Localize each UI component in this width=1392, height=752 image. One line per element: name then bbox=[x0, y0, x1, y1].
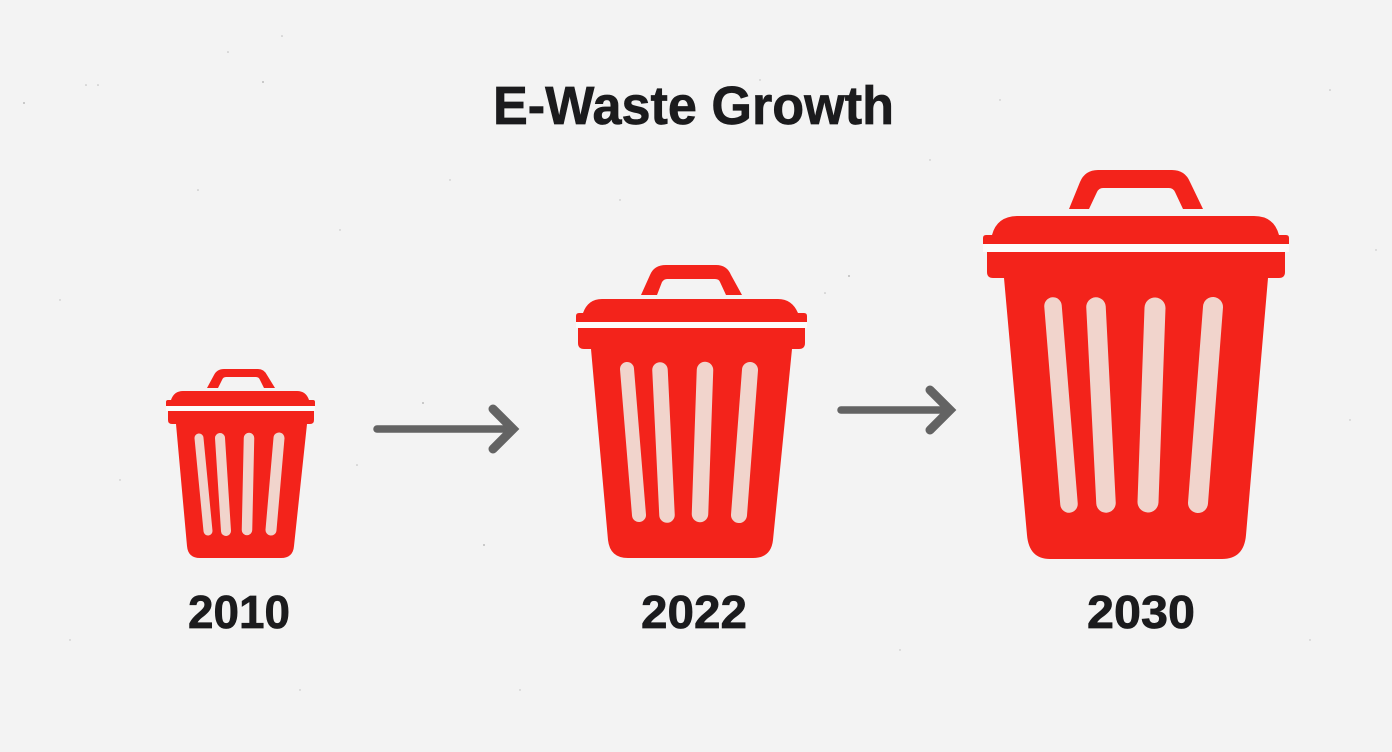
bin lid gap 2010 bbox=[166, 406, 315, 411]
bin lid gap 2030 bbox=[983, 244, 1289, 252]
bin stripes 2010 bbox=[199, 438, 279, 531]
bin body 2030 bbox=[987, 252, 1285, 559]
bin lid 2010 bbox=[166, 391, 315, 406]
bin lid gap 2022 bbox=[576, 322, 807, 328]
year label 2022: 2022 bbox=[641, 586, 747, 638]
bin lid 2022 bbox=[576, 299, 807, 322]
bin handle 2030 bbox=[1069, 170, 1203, 209]
arrow: 2022 to 2030 bbox=[841, 390, 950, 430]
icon: 2010 trash bin bbox=[166, 369, 315, 558]
arrow: 2010 to 2022 bbox=[377, 409, 513, 449]
title: E-Waste Growth bbox=[493, 76, 894, 136]
year label 2010: 2010 bbox=[188, 586, 290, 638]
bin lid 2030 bbox=[983, 216, 1289, 244]
bin body 2010 bbox=[168, 411, 314, 558]
bin stripes 2030 bbox=[1053, 306, 1213, 504]
bin handle 2010 bbox=[207, 369, 275, 388]
bin stripes 2022 bbox=[627, 369, 750, 515]
icon: 2022 trash bin bbox=[576, 265, 807, 558]
icon: 2030 trash bin bbox=[983, 170, 1289, 559]
year label 2030: 2030 bbox=[1087, 586, 1195, 638]
bin handle 2022 bbox=[641, 265, 742, 295]
bin body 2022 bbox=[578, 328, 805, 558]
